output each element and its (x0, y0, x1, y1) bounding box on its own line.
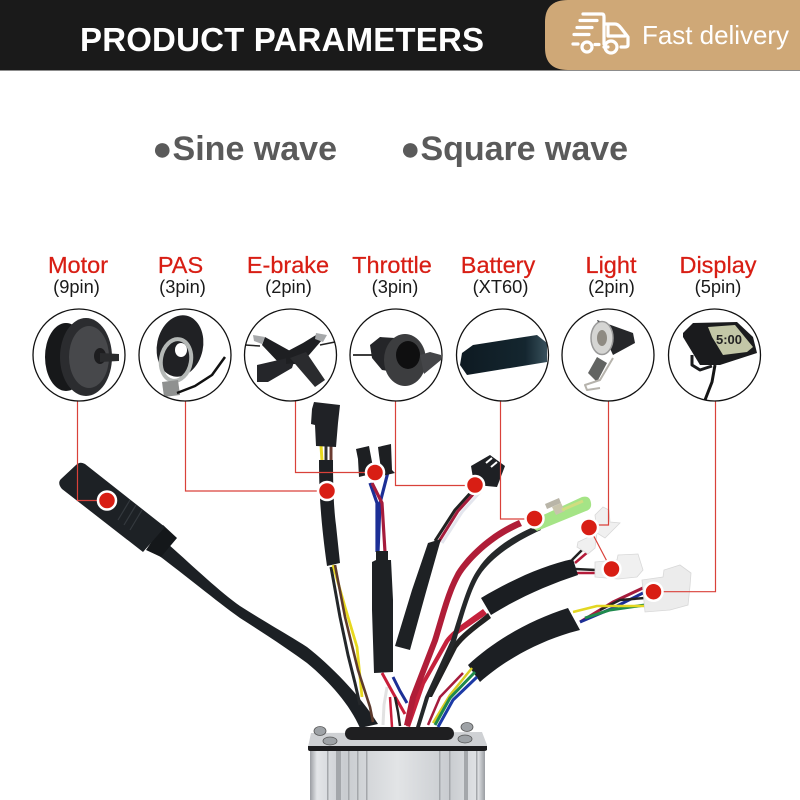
leader lines (78, 401, 716, 592)
icon: e-brake levers (244, 309, 336, 401)
label: E-brake: E-brake (247, 252, 329, 278)
wave options (152, 130, 628, 168)
label: PAS (158, 252, 206, 297)
label: Motor (48, 252, 108, 297)
label: Throttle: (3pin) (372, 276, 418, 297)
label: Motor: (9pin) (53, 276, 100, 297)
title: PRODUCT PARAMETERS (80, 21, 484, 58)
icon: PAS sensor (139, 309, 231, 401)
label: PAS: PAS (158, 252, 203, 278)
connector (311, 402, 340, 447)
label: Light: (2pin) (588, 276, 635, 297)
badge: fast delivery (545, 0, 800, 70)
label: E-brake: (2pin) (265, 276, 312, 297)
cable: light (481, 507, 643, 615)
label: Battery (461, 252, 535, 297)
icon: delivery truck (573, 14, 628, 53)
label: Display: Display (679, 252, 757, 278)
cable: throttle sleeve (395, 455, 505, 650)
icon: battery (456, 309, 548, 401)
lower wires (383, 687, 387, 725)
label: Light (586, 252, 637, 297)
sleeve (319, 460, 340, 566)
cable: PAS and brake bundle (311, 402, 373, 722)
label: Display: (5pin) (695, 276, 741, 297)
connector (471, 455, 505, 487)
label: Display (679, 252, 757, 297)
header bar (0, 0, 800, 70)
label: Motor: Motor (48, 252, 108, 278)
marker dots (98, 464, 662, 601)
icon: display (668, 309, 760, 401)
label: Throttle (352, 252, 432, 297)
label: E-brake (247, 252, 329, 297)
connector: white pair (577, 507, 620, 554)
icon: light (562, 309, 654, 401)
label: Battery: Battery (461, 252, 535, 278)
sleeve (372, 551, 393, 673)
icon: motor hub (33, 309, 125, 401)
cable: battery (404, 497, 591, 727)
connector: green XT60 (526, 497, 591, 531)
cable: throttle / brake twin (356, 444, 407, 727)
cable: display (428, 565, 691, 727)
label: Light: Light (586, 252, 637, 278)
option: square wave: ●Square wave (400, 130, 628, 168)
wires below sleeve (331, 567, 360, 705)
label: Battery: (XT60) (473, 276, 528, 297)
icon: display: 5:00 (716, 332, 742, 347)
delivery text: Fast delivery (642, 20, 789, 50)
label: PAS: (3pin) (159, 276, 206, 297)
cable: motor (59, 463, 378, 728)
option: sine wave: ●Sine wave (152, 130, 337, 168)
connector (642, 565, 691, 612)
rubber grommet (345, 727, 454, 740)
icon: throttle (350, 309, 442, 401)
wires above sleeve (321, 445, 322, 461)
controller box (308, 722, 487, 800)
connectors (356, 446, 375, 477)
label: Throttle: Throttle (352, 252, 432, 278)
